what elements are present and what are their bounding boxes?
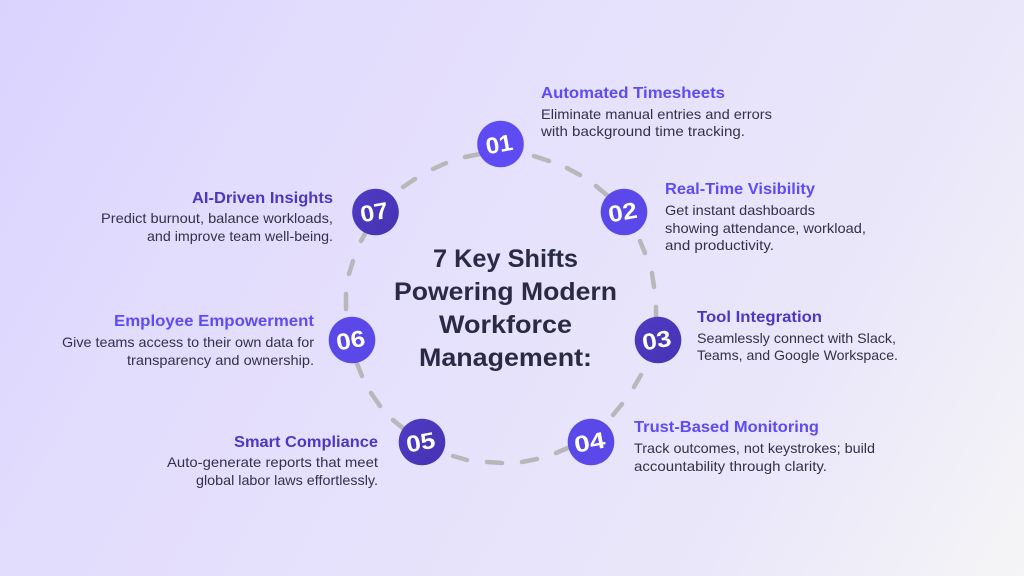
step 05 text: Smart Compliance: Smart Compliance: [234, 434, 378, 451]
step 01 text: Automated Timesheets: with background time tracking.: [540, 124, 745, 139]
step 07 badge: [352, 189, 399, 235]
step 07 text: AI-Driven Insights: [101, 190, 333, 244]
title: 7 Key Shifts: [433, 245, 578, 273]
step 06 badge: [329, 317, 375, 363]
dashed ring connecting the steps: [346, 154, 656, 463]
step 04 text: Trust-Based Monitoring: Track outcomes, not keystrokes; build: [634, 441, 875, 456]
step 05 text: Smart Compliance: global labor laws effortlessly.: [196, 473, 378, 488]
step 04 text: Trust-Based Monitoring: accountability through clarity.: [634, 459, 827, 474]
step 04 badge: 04: [572, 427, 607, 458]
step 01 text: Automated Timesheets: [540, 85, 772, 139]
step 07 text: AI-Driven Insights: AI-Driven Insights: [192, 190, 333, 207]
title: [394, 245, 617, 372]
step 07 text: AI-Driven Insights: and improve team well-being.: [147, 229, 333, 244]
step 02 text: Real-Time Visibility: Real-Time Visibility: [665, 181, 815, 198]
step 01 text: Automated Timesheets: Automated Timesheets: [541, 85, 725, 102]
step 04 badge: [568, 419, 614, 465]
step 03 text: Tool Integration: Tool Integration: [697, 309, 822, 326]
title: Workforce: [439, 311, 572, 339]
title: Management:: [419, 344, 592, 372]
title: Powering Modern: [394, 278, 617, 306]
step 06 badge: 06: [334, 325, 367, 355]
step 07 text: AI-Driven Insights: Predict burnout, balance workloads,: [101, 211, 333, 226]
step 03 text: Tool Integration: Seamlessly connect with Slack,: [697, 331, 896, 346]
step 05 badge: [399, 419, 445, 465]
step 03 badge: 03: [640, 325, 673, 355]
step 06 text: Employee Empowerment: [62, 313, 314, 368]
step 06 text: Employee Empowerment: transparency and ownership.: [127, 353, 314, 368]
step 02 text: Real-Time Visibility: Get instant dashboards: [665, 203, 815, 218]
step 02 badge: [601, 189, 647, 235]
step 06 text: Employee Empowerment: Give teams access to their own data for: [62, 335, 314, 350]
step 06 text: Employee Empowerment: Employee Empowerment: [114, 313, 314, 330]
step 02 text: Real-Time Visibility: [665, 181, 866, 253]
step 01 badge: [477, 121, 524, 167]
step 05 text: Smart Compliance: [167, 434, 378, 488]
step 05 badge: 05: [404, 427, 437, 457]
step 01 badge: 01: [484, 129, 515, 159]
step 02 text: Real-Time Visibility: and productivity.: [665, 238, 774, 253]
step 02 text: Real-Time Visibility: showing attendance, workload,: [665, 221, 866, 236]
step 05 text: Smart Compliance: Auto-generate reports that meet: [167, 455, 378, 470]
step 03 badge: [635, 317, 681, 363]
step 07 badge: 07: [358, 197, 390, 227]
step 02 badge: 02: [606, 197, 639, 227]
step 01 text: Automated Timesheets: Eliminate manual entries and errors: [541, 107, 772, 122]
step 03 text: Tool Integration: [697, 309, 898, 363]
step 04 text: Trust-Based Monitoring: [634, 419, 875, 474]
step 04 text: Trust-Based Monitoring: Trust-Based Monitoring: [634, 419, 819, 436]
step 03 text: Tool Integration: Teams, and Google Workspace.: [697, 348, 898, 363]
